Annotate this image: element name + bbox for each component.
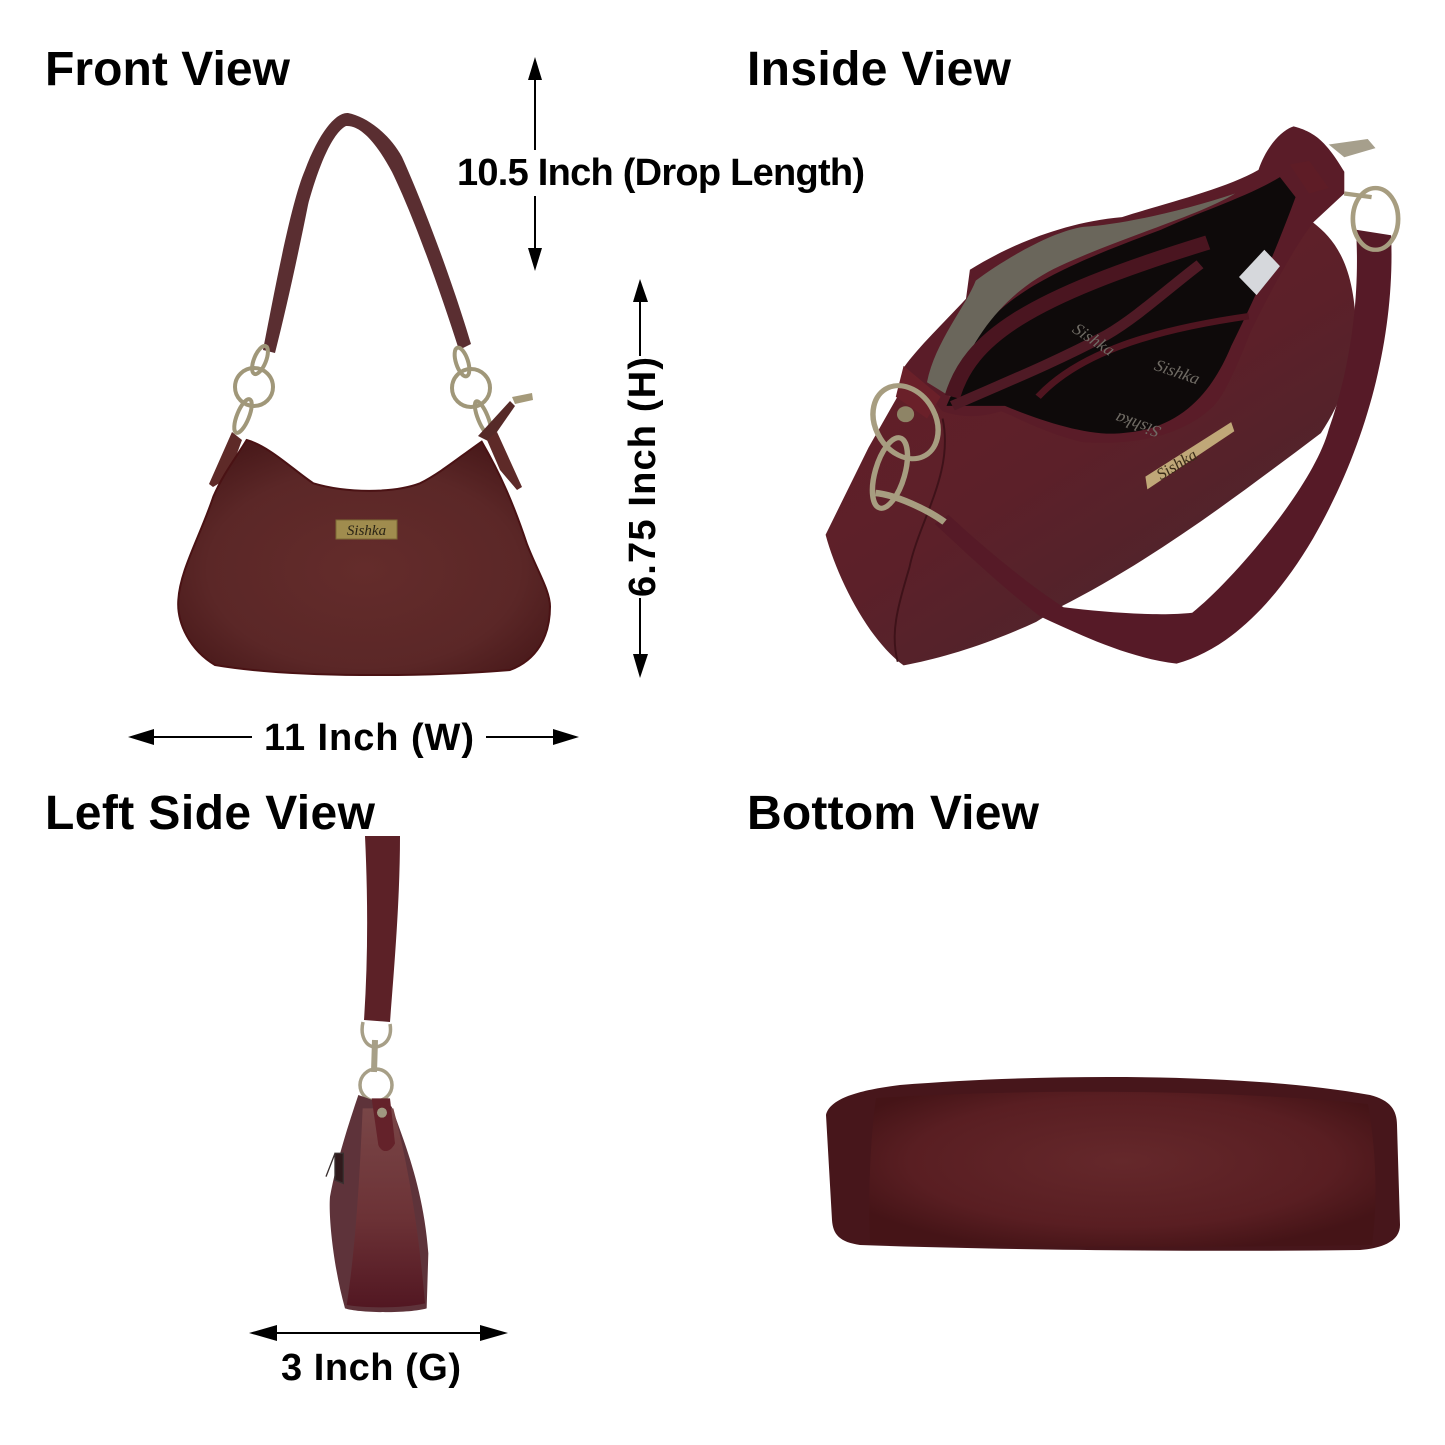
bag body [178,440,550,675]
label: drop length: 10.5 Inch (Drop Length) [457,152,865,194]
center gusset [347,1108,425,1307]
pocket zipper [952,264,1200,406]
brass logo plate [336,520,397,539]
strap [935,230,1392,664]
rivet [897,406,914,422]
strap tab [372,1098,395,1151]
rings left [861,376,950,522]
brass logo plate [1145,422,1234,489]
zipper pull [478,393,533,442]
arrow: height [633,279,648,678]
lining logo text: Sishka [1112,409,1163,441]
dark interior [946,177,1296,434]
arrow: drop length [528,57,542,271]
heading: Front View: Front View [45,43,291,96]
label: width: 11 Inch (W) [264,717,474,759]
label: height: 6.75 Inch (H) [622,357,664,597]
rings right [1344,188,1398,250]
left hardware rings [231,344,273,435]
center leather panel [869,1092,1375,1247]
zipper [326,1153,343,1183]
olive lining [927,193,1235,397]
label: gusset: 3 Inch (G) [281,1347,461,1389]
heading: Inside View: Inside View [747,43,1012,96]
pocket band top [952,242,1208,397]
brass logo plate: Sishka [347,523,386,539]
strap tab [896,366,941,419]
heading: Left Side View: Left Side View [45,787,376,840]
panel: front view bag [178,113,550,675]
right hardware rings [452,346,494,437]
bag outer body [826,223,1356,665]
side seam [895,419,945,662]
panel: inside view bag [826,126,1398,665]
hardware rings [360,1022,392,1101]
arrow: gusset [249,1325,508,1341]
lining logo text: Sishka [1152,356,1203,388]
side gusset tabs [209,432,522,490]
shoulder strap [263,113,471,353]
outer shell [826,1077,1400,1251]
price tag [1239,250,1280,295]
bag body [326,1095,428,1312]
arrow: width [128,729,579,745]
rivet [377,1108,387,1118]
zipper pull tab [1329,139,1376,157]
zipper tape and opening [904,126,1344,443]
lining logo text: Sishka [1069,320,1119,360]
top strap tab [1290,161,1329,193]
heading: Bottom View: Bottom View [747,787,1040,840]
panel: left side view bag [326,836,428,1312]
pocket band lower [1038,316,1249,397]
panel: bottom view bag [826,1077,1400,1251]
strap [364,836,400,1022]
brass logo plate: Sishka [1153,445,1201,483]
